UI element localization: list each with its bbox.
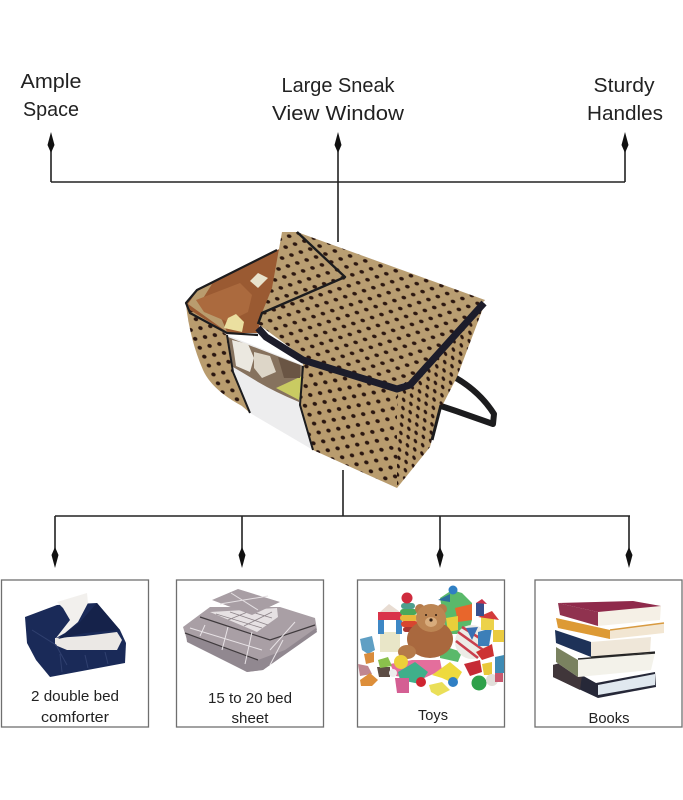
bag left panel <box>186 305 250 413</box>
toy: block arch <box>380 632 400 652</box>
bag front panel <box>300 362 397 488</box>
book: navy <box>555 630 651 657</box>
toy: teddy bear <box>407 620 453 658</box>
toy: small tower <box>478 628 492 646</box>
comforter image <box>25 593 126 677</box>
book: bottom dark <box>553 663 656 698</box>
card: comforter <box>2 580 148 727</box>
feature label: Sturdy Handles: Handles <box>587 103 663 125</box>
toy: floor pieces behind bear <box>390 660 442 680</box>
sheets label: 15 to 20 bed <box>208 691 292 707</box>
feature label: Large Sneak View Window <box>272 75 405 125</box>
feature label: Sturdy Handles: Sturdy <box>594 75 654 97</box>
sheets label <box>208 691 292 727</box>
book: red <box>558 601 661 626</box>
books label: Books <box>588 711 630 727</box>
feature label: Sturdy Handles <box>587 75 663 125</box>
bag top flap <box>258 232 485 386</box>
toy: lego tower <box>440 590 472 634</box>
feature label: Large Sneak View Window: View Window <box>272 103 405 125</box>
feature label: Large Sneak View Window: Large Sneak <box>282 75 395 97</box>
sheets image <box>183 589 317 672</box>
books image <box>553 601 664 698</box>
toys image <box>358 586 504 696</box>
bag right panel <box>397 303 485 488</box>
toy: floor pieces <box>360 636 375 654</box>
bag handle <box>441 378 494 424</box>
feature label: Ample Space: Space <box>23 99 79 121</box>
feature label: Ample Space <box>20 71 82 121</box>
book: olive <box>556 647 655 677</box>
comforter label: 2 double bed <box>31 689 119 705</box>
storage bag product <box>186 232 494 488</box>
toy: striped top <box>455 625 489 659</box>
toys label: Toys <box>418 708 448 724</box>
bottom connector with arrows <box>52 470 632 568</box>
flap fold and zipper <box>258 232 345 324</box>
feature label: Ample Space: Ample <box>20 71 82 93</box>
card: toys <box>358 580 504 727</box>
comforter label <box>31 689 119 726</box>
sheets label: sheet <box>232 711 268 727</box>
bag interior <box>186 244 292 333</box>
view window <box>227 335 313 450</box>
top connector with arrows <box>48 132 628 242</box>
card: bed sheets <box>176 580 324 727</box>
comforter label: comforter <box>41 710 109 726</box>
card: books <box>535 580 682 727</box>
toy: stacking rings <box>401 603 415 609</box>
book: orange <box>556 618 664 639</box>
